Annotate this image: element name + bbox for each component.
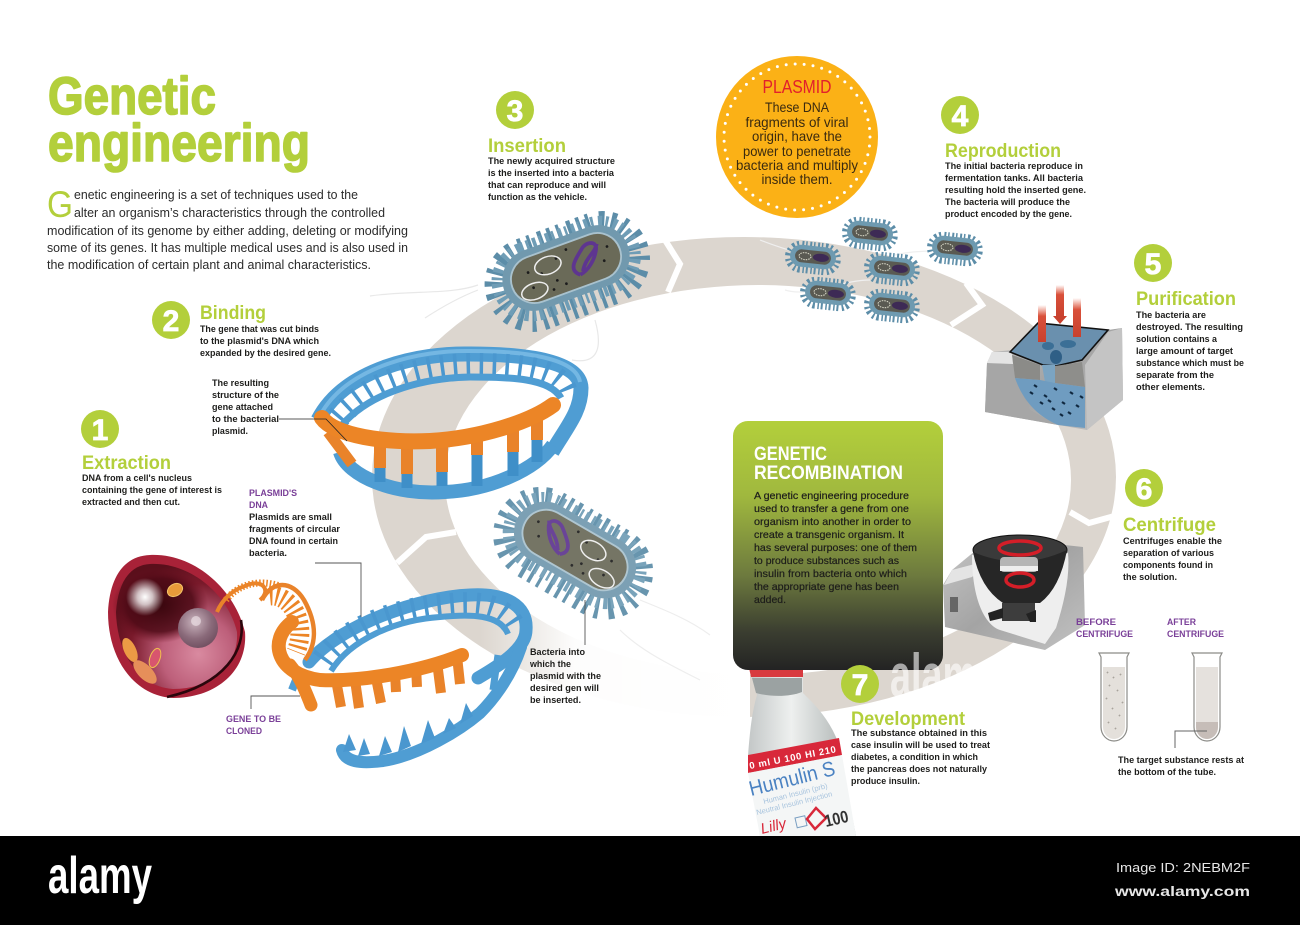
step 7: development: case insulin will be used to treat: [851, 740, 991, 751]
genetic recombination panel: A genetic engineering procedure: [754, 490, 909, 502]
illustration: insulin vial: 100: [823, 807, 850, 831]
test tube: before centrifuge: BEFORE: [1076, 617, 1117, 628]
step 2: binding: [152, 301, 331, 359]
intro text: alter an organism’s characteristics through the controlled: [74, 205, 385, 220]
step 3: insertion: The newly acquired structure: [488, 156, 615, 167]
footer bar: www.alamy.com: [1114, 883, 1250, 899]
step 6: centrifuge: 6: [1136, 473, 1152, 506]
footer bar: alamy: [48, 847, 152, 905]
step 6: centrifuge: components found in: [1123, 560, 1213, 571]
intro text: enetic engineering is a set of techniques used to the: [74, 187, 358, 202]
step 6: centrifuge: Centrifuge: [1123, 515, 1216, 536]
callout line: gene to be cloned: [251, 696, 300, 709]
callout: plasmid's DNA: bacteria.: [249, 548, 287, 559]
step 5: purification: [1134, 244, 1244, 393]
callout: plasmid's DNA: PLASMID'S: [249, 488, 298, 499]
step 1: extraction: [81, 410, 222, 508]
step 3: insertion: 3: [507, 95, 523, 128]
callout: plasmid's DNA: DNA: [249, 500, 268, 511]
step 7: development: produce insulin.: [851, 776, 920, 787]
step 6: centrifuge: Centrifuges enable the: [1123, 536, 1222, 547]
step 2: binding: expanded by the desired gene.: [200, 348, 331, 359]
genetic recombination panel: insulin from bacteria onto which: [754, 568, 907, 580]
callout: resulting structure: The resulting: [212, 378, 269, 389]
callout: bacteria to be inserted: [529, 647, 601, 706]
step 3: insertion: that can reproduce and will: [488, 180, 606, 191]
callout: plasmid's DNA: DNA found in certain: [249, 536, 338, 547]
title: engineering: [48, 114, 310, 173]
step 5: purification: 5: [1145, 248, 1161, 281]
step 4: reproduction: 4: [952, 100, 969, 133]
plasmid circle callout: power to penetrate: [743, 143, 851, 159]
step 5: purification: large amount of target: [1136, 346, 1234, 357]
callout: plasmid's DNA: Plasmids are small: [249, 512, 332, 523]
illustration: insulin vial: 0 ml U 100 HI 210: [748, 744, 837, 772]
title: Genetic: [48, 67, 216, 126]
illustration: centrifuge machine: [943, 535, 1085, 650]
step 1: extraction: Extraction: [82, 453, 171, 474]
step 4: reproduction: The initial bacteria reproduce in: [945, 161, 1083, 172]
step 7: development: [841, 665, 991, 787]
plasmid circle callout: origin, have the: [752, 128, 842, 144]
plasmid circle callout: [716, 56, 878, 218]
illustration: reproducing bacteria: [760, 220, 979, 318]
step 3: insertion: function as the vehicle.: [488, 192, 587, 203]
genetic recombination panel: RECOMBINATION: [754, 463, 903, 484]
step 4: reproduction: product encoded by the gene.: [945, 209, 1072, 220]
callout: plasmid's DNA: [249, 488, 340, 559]
genetic recombination panel: [733, 421, 943, 670]
step 4: reproduction: [941, 96, 1086, 220]
genetic recombination panel: create a transgenic organism. It: [754, 529, 904, 541]
genetic recombination panel: has several purposes: one of them: [754, 542, 917, 554]
title: [48, 67, 310, 173]
step 3: insertion: [488, 91, 615, 203]
illustration: insulin vial: [747, 668, 856, 838]
step 6: centrifuge: separation of various: [1123, 548, 1214, 559]
callout: gene to be cloned: GENE TO BE: [226, 714, 282, 725]
illustration: purification tank: [985, 285, 1123, 430]
plasmid circle callout: fragments of viral: [746, 114, 848, 130]
genetic recombination panel: GENETIC: [754, 444, 827, 465]
plasmid circle callout: These DNA: [765, 99, 830, 115]
footer bar: Image ID: 2NEBM2F: [1116, 861, 1250, 875]
genetic recombination panel: to produce substances such as: [754, 555, 899, 567]
callout: target substance text: The target substance rests at: [1118, 755, 1245, 766]
plasmid circle callout: bacteria and multiply: [736, 157, 858, 173]
callout: resulting structure: to the bacterial: [212, 414, 279, 425]
callout: bacteria to be inserted: Bacteria into: [530, 647, 585, 658]
illustration: bacterium being inserted: [370, 215, 644, 361]
intro text: modification of its genome by either adding, deleting or modifying: [47, 223, 408, 238]
step 7: development: Development: [851, 709, 966, 730]
step 7: development: diabetes, a condition in which: [851, 752, 978, 763]
step 3: insertion: is the inserted into a bacteria: [488, 168, 615, 179]
step 2: binding: Binding: [200, 303, 266, 324]
step 4: reproduction: Reproduction: [945, 141, 1061, 162]
illustration: insulin vial: Human Insulin (prb): [762, 781, 829, 806]
step 5: purification: other elements.: [1136, 382, 1205, 393]
step 2: binding: 2: [163, 305, 179, 338]
step 5: purification: destroyed. The resulting: [1136, 322, 1243, 333]
step 1: extraction: containing the gene of interest is: [82, 485, 222, 496]
callout: target substance text: the bottom of the tube.: [1118, 767, 1216, 778]
test tube: after centrifuge: CENTRIFUGE: [1167, 629, 1225, 640]
step 4: reproduction: The bacteria will produce the: [945, 197, 1070, 208]
callout: resulting structure: gene attached: [212, 402, 273, 413]
step 7: development: 7: [852, 669, 868, 702]
callout line: bacteria: [584, 600, 586, 645]
genetic recombination panel: used to transfer a gene from one: [754, 503, 909, 515]
intro text: G: [47, 184, 73, 225]
step 2: binding: The gene that was cut binds: [200, 324, 319, 335]
step 5: purification: Purification: [1136, 289, 1236, 310]
callout: resulting structure: [212, 378, 279, 437]
illustration: insulin vial: Lilly: [759, 815, 789, 838]
test tube: before centrifuge: [1076, 617, 1134, 741]
intro text: the modification of certain plant and animal characteristics.: [47, 257, 371, 272]
step 6: centrifuge: [1123, 469, 1222, 583]
callout line: target substance: [1175, 731, 1207, 748]
step 1: extraction: 1: [92, 414, 108, 447]
test tube: after centrifuge: [1167, 617, 1225, 741]
plasmid circle callout: inside them.: [762, 171, 832, 187]
genetic recombination panel: the appropriate gene has been: [754, 581, 899, 593]
step 3: insertion: Insertion: [488, 136, 566, 157]
callout: bacteria to be inserted: plasmid with the: [530, 671, 601, 682]
callout: bacteria to be inserted: desired gen will: [530, 683, 599, 694]
intro text: some of its genes. It has multiple medical uses and is also used in: [47, 240, 408, 255]
illustration: binding plasmid: [318, 351, 581, 493]
illustration: cell with nucleus: [108, 555, 245, 698]
genetic recombination panel: added.: [754, 594, 786, 606]
step 5: purification: substance which must be: [1136, 358, 1244, 369]
step 4: reproduction: resulting hold the inserted gene.: [945, 185, 1086, 196]
plasmid circle callout: PLASMID: [762, 77, 832, 97]
step 1: extraction: DNA from a cell's nucleus: [82, 473, 192, 484]
step 1: extraction: extracted and then cut.: [82, 497, 180, 508]
callout: gene to be cloned: [226, 714, 282, 737]
intro text: [47, 184, 408, 272]
callout: gene to be cloned: CLONED: [226, 726, 262, 737]
step 7: development: The substance obtained in this: [851, 728, 987, 739]
callout: target substance text: [1118, 755, 1245, 778]
callout: resulting structure: plasmid.: [212, 426, 248, 437]
genetic recombination panel: organism into another in order to: [754, 516, 911, 528]
callout: resulting structure: structure of the: [212, 390, 279, 401]
illustration: insulin vial: Humulin S: [747, 757, 838, 801]
illustration: second bacterium: [497, 488, 710, 680]
step 6: centrifuge: the solution.: [1123, 572, 1177, 583]
callout: bacteria to be inserted: be inserted.: [530, 695, 581, 706]
step 4: reproduction: fermentation tanks. All bacteria: [945, 173, 1084, 184]
test tube: after centrifuge: AFTER: [1167, 617, 1196, 628]
callout: bacteria to be inserted: which the: [529, 659, 571, 670]
callout line: plasmid's DNA: [315, 563, 361, 617]
illustration: cut plasmid: [217, 583, 526, 762]
watermark fragment: alam: [890, 642, 976, 709]
test tube: before centrifuge: CENTRIFUGE: [1076, 629, 1134, 640]
illustration: insulin vial: Neutral Insulin Injection: [755, 789, 833, 817]
footer bar: [0, 836, 1300, 925]
callout: plasmid's DNA: fragments of circular: [249, 524, 340, 535]
step 2: binding: to the plasmid's DNA which: [200, 336, 319, 347]
step 7: development: the pancreas does not naturally: [851, 764, 988, 775]
callout line: gene attached: [279, 419, 347, 441]
step 5: purification: The bacteria are: [1136, 310, 1206, 321]
step 5: purification: solution contains a: [1136, 334, 1218, 345]
step 5: purification: separate from the: [1136, 370, 1214, 381]
process ring with arrows: [372, 237, 1118, 765]
